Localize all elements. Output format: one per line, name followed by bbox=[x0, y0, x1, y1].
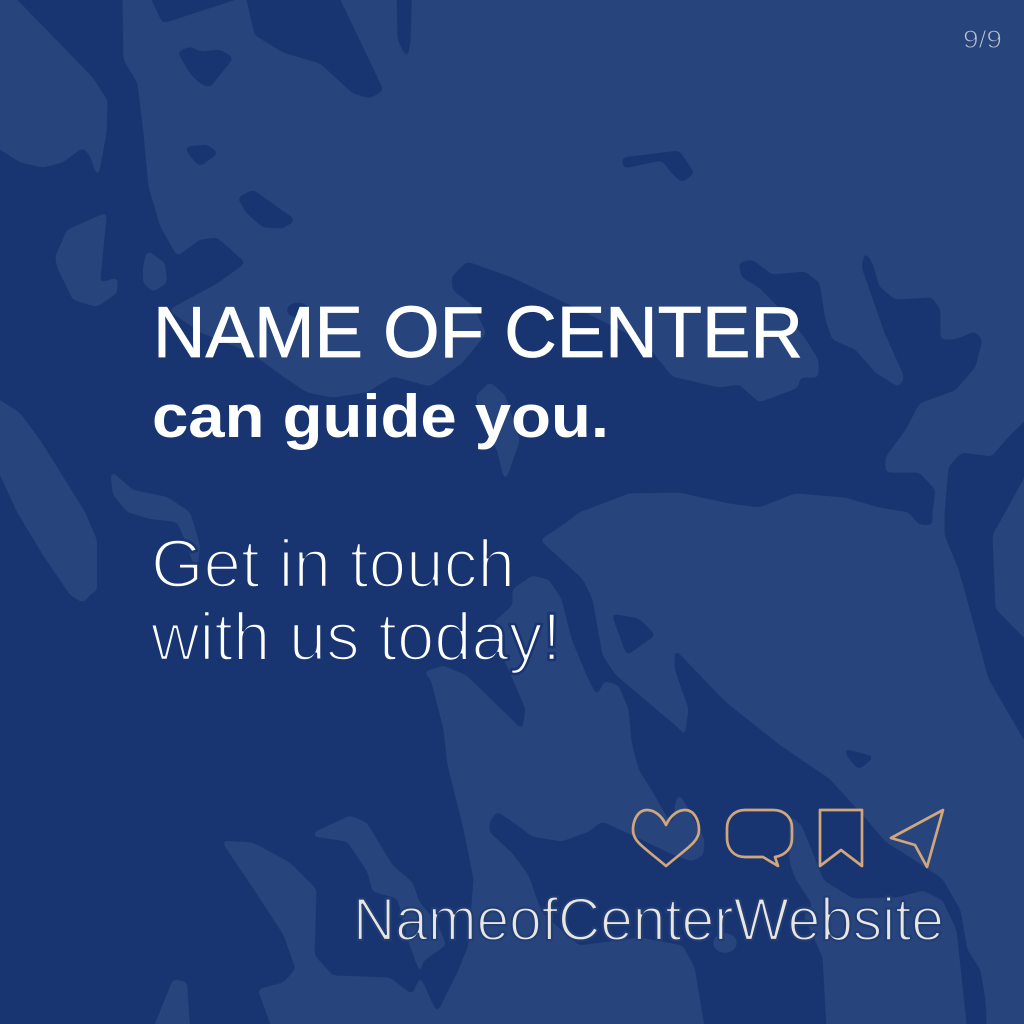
icon: bookmark bbox=[820, 810, 862, 866]
call to action text: with us today! bbox=[150, 599, 561, 675]
heading: name of center: NAME OF CENTER bbox=[153, 293, 803, 373]
social icons row bbox=[633, 810, 943, 867]
icon: speech bubble bbox=[727, 810, 792, 866]
icon: heart bbox=[633, 810, 699, 866]
call to action text: Get in touch bbox=[151, 526, 515, 602]
subheading: can guide you: can guide you. bbox=[152, 383, 609, 450]
page number: 9/9 bbox=[963, 26, 1002, 54]
icon: send arrow bbox=[891, 810, 943, 867]
call to action text bbox=[150, 526, 561, 675]
website name: NameofCenterWebsite bbox=[353, 886, 944, 953]
